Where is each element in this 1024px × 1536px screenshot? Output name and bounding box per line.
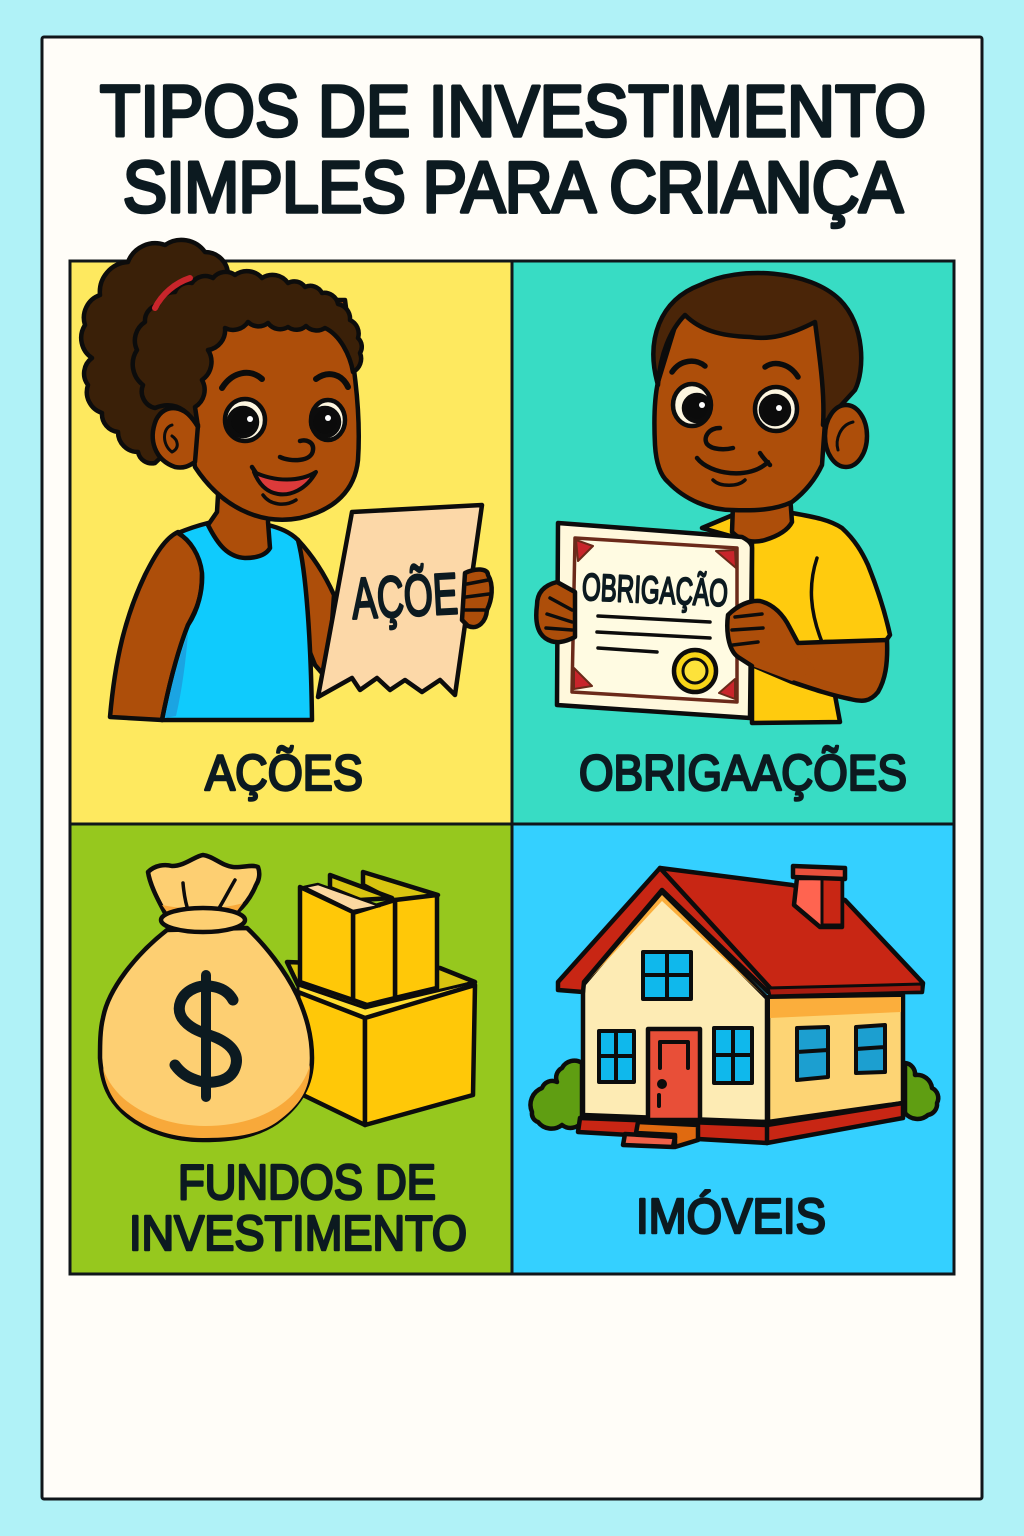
panel: obrigações bbox=[512, 261, 954, 824]
eyes bbox=[225, 399, 265, 441]
right wall bbox=[768, 995, 903, 1122]
box right face bbox=[365, 985, 475, 1125]
back book bbox=[363, 872, 438, 903]
hair tie bbox=[155, 278, 190, 308]
ponytail bbox=[81, 240, 228, 463]
neck bbox=[208, 495, 270, 558]
nose bbox=[280, 440, 313, 460]
ear detail bbox=[837, 422, 853, 450]
hair front bbox=[133, 271, 362, 427]
illustration: girl holding stock paper bbox=[81, 240, 492, 720]
tank top bbox=[162, 523, 312, 720]
chimney bbox=[794, 878, 842, 927]
right fingers bbox=[732, 614, 763, 645]
bag shading bbox=[103, 1065, 310, 1138]
front book spine bbox=[353, 900, 395, 1005]
panel: fundos de investimento bbox=[70, 824, 512, 1274]
fingers bbox=[464, 580, 489, 610]
panel: ações bbox=[70, 240, 512, 824]
tank shading bbox=[165, 633, 188, 718]
box left face bbox=[298, 992, 365, 1125]
front book bbox=[300, 887, 353, 1000]
illustration: box with books bbox=[287, 872, 475, 1125]
bag body bbox=[100, 928, 312, 1140]
label: fundos de investimento bbox=[129, 1156, 467, 1261]
label: obrigações: OBRIGAAÇÕES bbox=[579, 745, 907, 801]
dollar sign bbox=[175, 986, 236, 1082]
knot shading bbox=[162, 903, 243, 912]
book pages bbox=[304, 884, 380, 911]
eyes bbox=[673, 384, 711, 426]
left arm bbox=[110, 532, 202, 720]
door panel bbox=[659, 1042, 688, 1106]
certificate label: OBRIGAÇÃO bbox=[581, 566, 729, 615]
illustration: house bbox=[530, 866, 938, 1147]
label: ações: AÇÕES bbox=[205, 745, 363, 801]
right arm bbox=[298, 540, 334, 680]
bag knot top bbox=[148, 855, 259, 913]
ear detail bbox=[164, 425, 177, 452]
label: imóveis: IMÓVEIS bbox=[636, 1190, 826, 1244]
base bbox=[578, 1103, 903, 1143]
thumb hand bbox=[462, 569, 492, 627]
neck bbox=[732, 495, 792, 541]
label: fundos de investimento: INVESTIMENTO bbox=[129, 1207, 467, 1261]
door bbox=[648, 1029, 700, 1120]
right hand outline bbox=[727, 601, 798, 666]
eave bbox=[768, 984, 922, 996]
face bbox=[654, 310, 825, 510]
gable roof bbox=[558, 868, 772, 992]
icon: money bag bbox=[100, 855, 312, 1140]
sleeve line bbox=[811, 558, 822, 642]
ear bbox=[153, 408, 198, 468]
illustration: boy holding bond certificate bbox=[536, 273, 890, 723]
title bbox=[100, 70, 926, 228]
mouth bbox=[697, 453, 770, 473]
mouth bbox=[254, 472, 316, 494]
bag collar bbox=[161, 908, 245, 932]
ear bbox=[825, 405, 867, 467]
label: fundos de investimento: FUNDOS DE bbox=[178, 1156, 436, 1210]
panel: imóveis bbox=[512, 824, 954, 1274]
seal bbox=[674, 650, 716, 692]
shirt bbox=[702, 513, 890, 723]
certificate bbox=[557, 523, 752, 718]
brows bbox=[672, 361, 798, 377]
certificate frame bbox=[572, 538, 737, 702]
hair bbox=[653, 273, 861, 425]
left fingers bbox=[546, 598, 572, 630]
frame corners bbox=[574, 540, 736, 699]
paper bbox=[318, 505, 482, 697]
arm bbox=[752, 620, 887, 701]
front wall bbox=[583, 892, 767, 1122]
certificate lines bbox=[597, 616, 710, 652]
windows bbox=[599, 952, 752, 1083]
face bbox=[190, 300, 359, 520]
roof slope bbox=[660, 868, 923, 993]
paper label: AÇÕE bbox=[350, 561, 459, 632]
right hand fill bbox=[727, 601, 815, 681]
title: SIMPLES PARA CRIANÇA bbox=[123, 146, 903, 228]
title: TIPOS DE INVESTIMENTO bbox=[100, 70, 926, 152]
left hand bbox=[536, 582, 575, 642]
steps bbox=[636, 1122, 698, 1147]
wall band bbox=[770, 997, 901, 1018]
bag folds bbox=[183, 880, 235, 913]
box rim bbox=[298, 982, 475, 1018]
nose bbox=[706, 428, 733, 449]
brows bbox=[222, 373, 348, 388]
bushes bbox=[530, 1061, 582, 1129]
box interior bbox=[287, 962, 475, 1018]
gable trim bbox=[587, 895, 764, 996]
